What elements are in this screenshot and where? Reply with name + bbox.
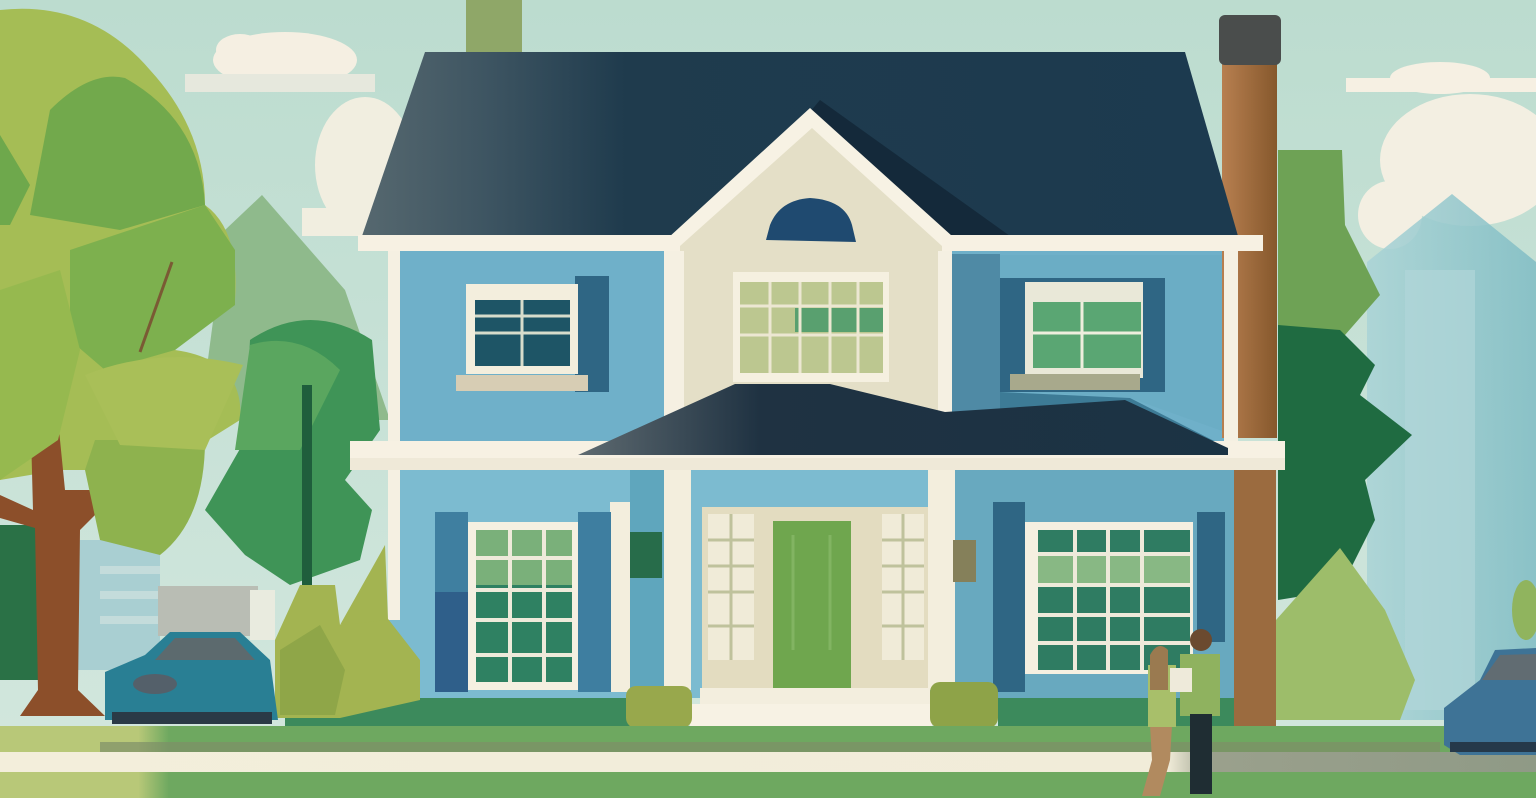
background trees left [0, 195, 390, 680]
cloud: behind roof [302, 97, 415, 236]
trunk [0, 390, 120, 716]
shrub right [1276, 548, 1415, 720]
roof main [362, 52, 1238, 236]
lawn and path [0, 726, 1536, 798]
roof shading [810, 100, 1010, 236]
bush far right [1512, 580, 1536, 640]
woman [1142, 725, 1172, 796]
porch beam [350, 441, 1285, 470]
cloud: top right [1346, 62, 1536, 94]
door [773, 521, 851, 689]
tree: large left [0, 9, 243, 716]
car left [105, 632, 278, 724]
house: upper wall [388, 250, 1228, 445]
window: lower left with shutters [435, 512, 611, 692]
small window by porch [630, 532, 662, 578]
eave left and right [358, 235, 1263, 251]
window: upper left [456, 276, 609, 392]
foliage layers [30, 77, 205, 230]
foundation hedge [285, 698, 1234, 726]
window: upper center [733, 272, 889, 382]
window: lower right with shutters [993, 502, 1225, 692]
tree: round right of large tree [205, 320, 380, 585]
window: upper right [1000, 278, 1165, 392]
front door surround [702, 507, 928, 690]
bush: porch left [626, 686, 692, 728]
cloud: top left [185, 32, 375, 92]
people [1142, 629, 1220, 796]
arched window in gable [766, 198, 856, 242]
chimney lower [1234, 470, 1276, 728]
foliage back [0, 9, 240, 480]
background tower right [1367, 194, 1536, 720]
porch roof [578, 384, 1228, 455]
house: lower wall [388, 470, 1238, 698]
porch columns [610, 470, 955, 692]
wall lamp [953, 540, 976, 582]
central gable [668, 108, 952, 420]
man [1190, 629, 1212, 651]
porch steps [690, 688, 932, 726]
bushes left of house [275, 545, 420, 718]
cloud: right [1358, 94, 1536, 249]
bush: porch right [930, 682, 998, 728]
chimney upper [1219, 15, 1281, 438]
background chimney stub top [466, 0, 522, 52]
garage building left [75, 540, 275, 670]
wall trim columns [388, 251, 1238, 620]
background trees right [1278, 150, 1412, 600]
car right [1444, 648, 1536, 755]
